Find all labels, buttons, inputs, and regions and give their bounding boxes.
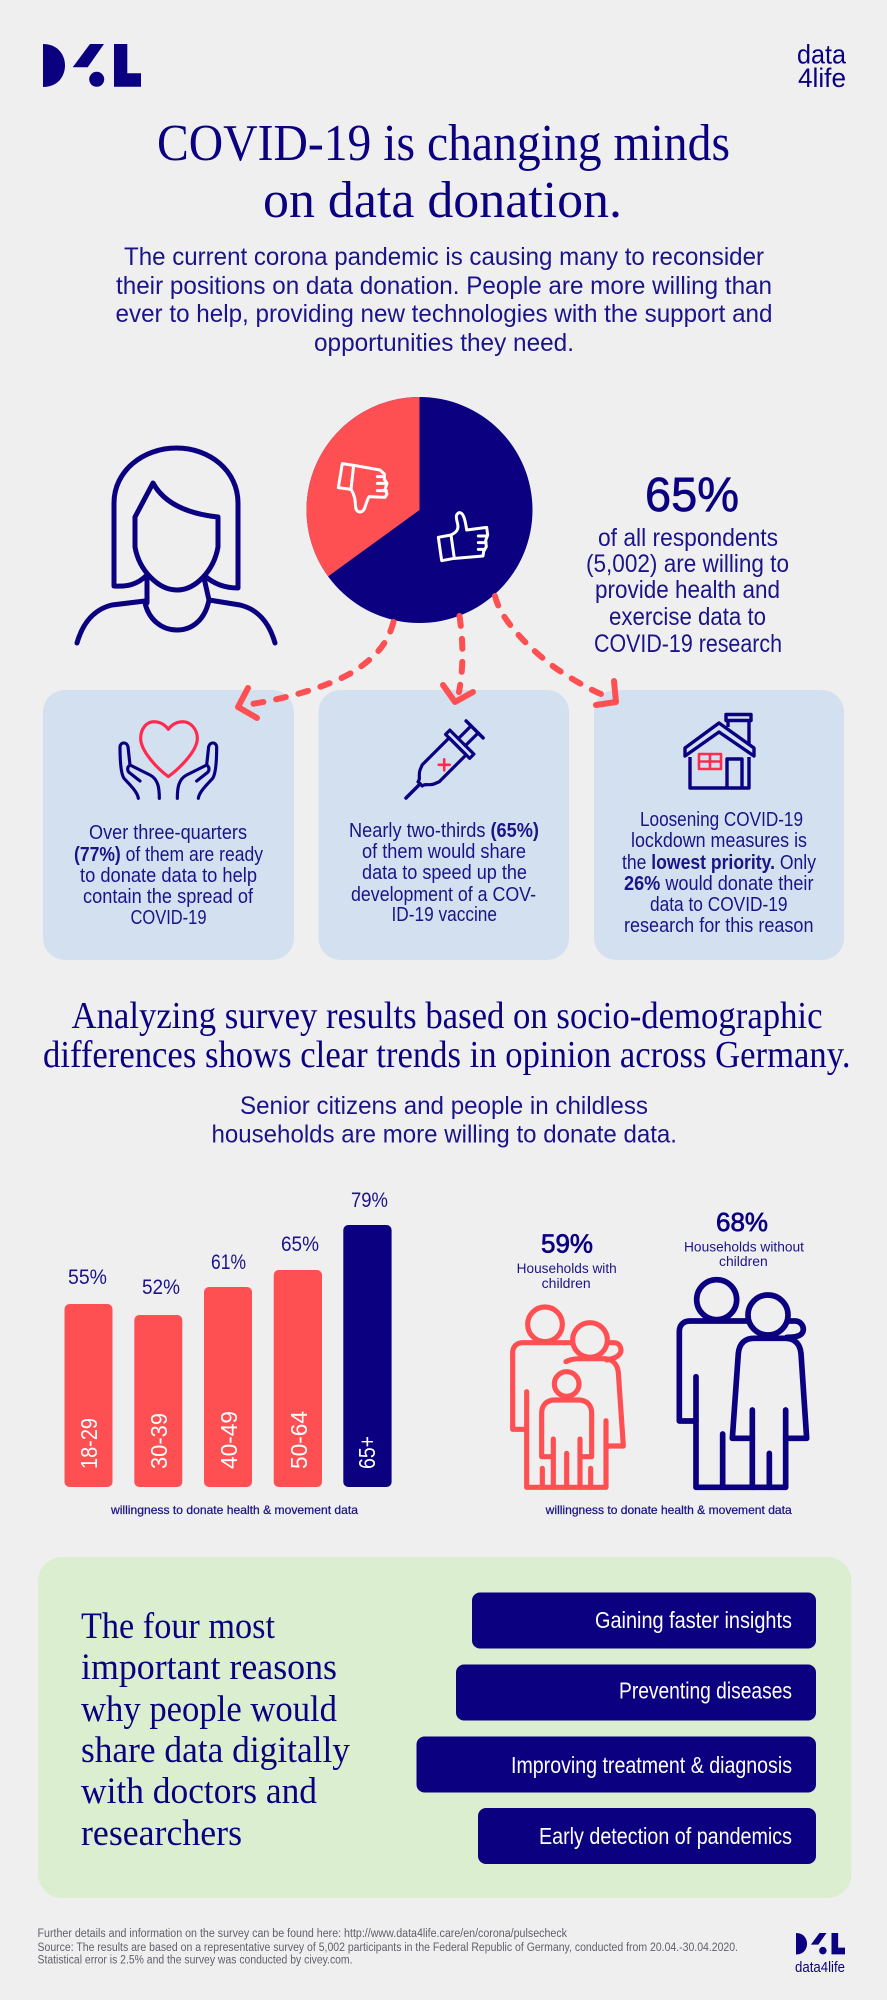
section heading xyxy=(43,995,850,1076)
icon: couple without children xyxy=(679,1280,807,1487)
arrow: pie to third card xyxy=(495,596,616,705)
card text: 26%: lockdown measures is xyxy=(631,830,807,852)
card text: 26%: 26% would donate their xyxy=(624,873,814,895)
intro text: opportunities they need. xyxy=(314,329,574,357)
icon: woman portrait xyxy=(77,448,275,643)
icon: hands holding heart xyxy=(120,722,217,798)
stat description: (5,002) are willing to xyxy=(586,550,789,578)
section subheading: Senior citizens and people in childless xyxy=(240,1092,648,1120)
arrow: pie to first card xyxy=(238,622,394,718)
card text: 26%: Loosening COVID-19 xyxy=(640,809,803,831)
stat: households without children: 68% xyxy=(716,1209,768,1237)
logo wordmark: data 4life: 4life xyxy=(798,63,846,93)
reasons heading: with doctors and xyxy=(81,1771,317,1812)
bar: 65+: 79% xyxy=(351,1188,388,1212)
reason: improving treatment and diagnosis xyxy=(416,1736,816,1792)
stat: households with children: Households with xyxy=(517,1261,617,1276)
card text: 65%: Nearly two-thirds (65%) xyxy=(349,820,539,842)
stat description: provide health and xyxy=(595,576,780,604)
card text: 77%: to donate data to help xyxy=(80,865,257,887)
icon: thumbs up xyxy=(438,513,488,561)
bar: 65+ xyxy=(343,1188,392,1487)
red cross xyxy=(439,759,450,770)
title: COVID-19 is changing minds xyxy=(157,115,730,172)
arrow: pie to second card xyxy=(443,616,473,702)
stat: households without children xyxy=(684,1209,804,1269)
card text: 65%: development of a COV- xyxy=(351,884,536,906)
footer logo: data4life xyxy=(795,1959,845,1976)
card text: 26%: the lowest priority. Only xyxy=(622,852,816,874)
logo: D4L mark xyxy=(43,44,141,87)
section heading: Analyzing survey results based on socio-demographic xyxy=(72,995,822,1037)
stat description: exercise data to xyxy=(609,603,766,631)
card text: 65%: of them would share xyxy=(362,841,526,863)
intro text: their positions on data donation. People are more willing than xyxy=(116,272,772,300)
red window xyxy=(699,754,721,769)
reasons heading: why people would xyxy=(81,1689,337,1730)
bar: 18-29: 18-29 xyxy=(76,1418,102,1469)
footer notes xyxy=(38,1928,738,1966)
icon: house xyxy=(685,714,754,788)
reasons heading: The four most xyxy=(81,1606,276,1647)
bar: 50-64 xyxy=(274,1232,322,1487)
bar: 30-39: 30-39 xyxy=(146,1413,172,1469)
logo wordmark: data 4life: data xyxy=(797,40,847,70)
intro text: The current corona pandemic is causing many to reconsider xyxy=(124,243,764,271)
bar: 40-49 xyxy=(204,1250,252,1487)
bar: 30-39: 52% xyxy=(142,1275,180,1299)
bar: 18-29 xyxy=(64,1265,112,1487)
footer logo xyxy=(795,1933,845,1976)
footer notes: Source: The results are based on a representative survey of 5,002 participants in the Federal Republic of Germany, conducted from 20.04.-30.04.2020. xyxy=(38,1942,738,1954)
reason: gaining faster insights: Gaining faster insights xyxy=(595,1607,792,1633)
intro text xyxy=(116,243,772,357)
footer notes: Statistical error is 2.5% and the survey was conducted by civey.com. xyxy=(38,1954,352,1966)
bar: 50-64: 65% xyxy=(281,1232,319,1256)
card text: 26%: research for this reason xyxy=(624,915,814,937)
title xyxy=(157,115,730,229)
bar: 40-49: 61% xyxy=(211,1250,246,1274)
reasons heading: share data digitally xyxy=(81,1730,350,1771)
card text: 26% xyxy=(622,809,816,937)
reasons heading: researchers xyxy=(81,1813,242,1854)
panel: card backgrounds xyxy=(43,690,844,960)
hands xyxy=(120,743,217,798)
reason: early detection of pandemics xyxy=(478,1808,816,1864)
reasons heading xyxy=(81,1606,350,1854)
bar: 30-39 xyxy=(134,1275,182,1487)
card text: 65%: data to speed up the xyxy=(362,862,527,884)
pie chart: 65% willing, 35% unwilling xyxy=(306,397,532,623)
logo wordmark: data 4life xyxy=(797,40,847,93)
stat: households with children xyxy=(517,1230,617,1291)
card text: 26%: data to COVID-19 xyxy=(650,894,788,916)
stat: 65% of respondents xyxy=(586,469,789,658)
icon: thumbs down xyxy=(338,464,387,512)
stat description: of all respondents xyxy=(598,524,778,552)
pie slice: unwilling 35% xyxy=(307,397,420,576)
card text: 77% xyxy=(74,822,263,929)
reason: preventing diseases: Preventing diseases xyxy=(619,1678,792,1704)
bar chart caption: willingness to donate health & movement data xyxy=(110,1503,358,1517)
reason: early detection of pandemics: Early detection of pandemics xyxy=(539,1823,792,1849)
card text: 77%: contain the spread of xyxy=(83,886,253,908)
title: on data donation. xyxy=(263,172,622,229)
heart xyxy=(141,722,197,777)
stat: households with children: children xyxy=(542,1276,591,1291)
stat number: 65% xyxy=(645,469,739,522)
pie slice: willing 65% xyxy=(306,397,532,623)
reason: improving treatment and diagnosis: Improving treatment & diagnosis xyxy=(511,1752,792,1778)
icon: syringe xyxy=(394,717,487,810)
reasons heading: important reasons xyxy=(81,1647,337,1688)
panel: reasons xyxy=(38,1557,852,1898)
stat: households with children: 59% xyxy=(541,1230,593,1258)
icon: family with child xyxy=(513,1307,623,1487)
bar: 40-49: 40-49 xyxy=(216,1411,242,1469)
card text: 77%: (77%) of them are ready xyxy=(74,844,263,866)
card text: 77%: Over three-quarters xyxy=(89,822,247,844)
section subheading xyxy=(212,1092,677,1148)
card text: 65% xyxy=(349,820,539,926)
stat description: COVID-19 research xyxy=(594,630,782,658)
card text: 65%: ID-19 vaccine xyxy=(392,904,497,926)
footer notes: Further details and information on the survey can be found here: http://www.data4life.care/en/corona/pulsecheck xyxy=(38,1928,567,1940)
stat: households without children: Households without xyxy=(684,1240,804,1254)
household caption: willingness to donate health & movement data xyxy=(545,1503,792,1517)
bar: 18-29: 55% xyxy=(68,1265,107,1289)
intro text: ever to help, providing new technologies with the support and xyxy=(116,300,772,328)
bar: 65+: 65+ xyxy=(354,1436,380,1469)
section subheading: households are more willing to donate data. xyxy=(212,1120,677,1148)
stat: households without children: children xyxy=(719,1254,768,1269)
reason: preventing diseases xyxy=(456,1664,816,1720)
card text: 77%: COVID-19 xyxy=(130,907,206,929)
reason: gaining faster insights xyxy=(472,1592,816,1648)
bar chart: willingness by age xyxy=(64,1188,392,1487)
stat description xyxy=(586,524,789,658)
bar: 50-64: 50-64 xyxy=(286,1411,312,1469)
